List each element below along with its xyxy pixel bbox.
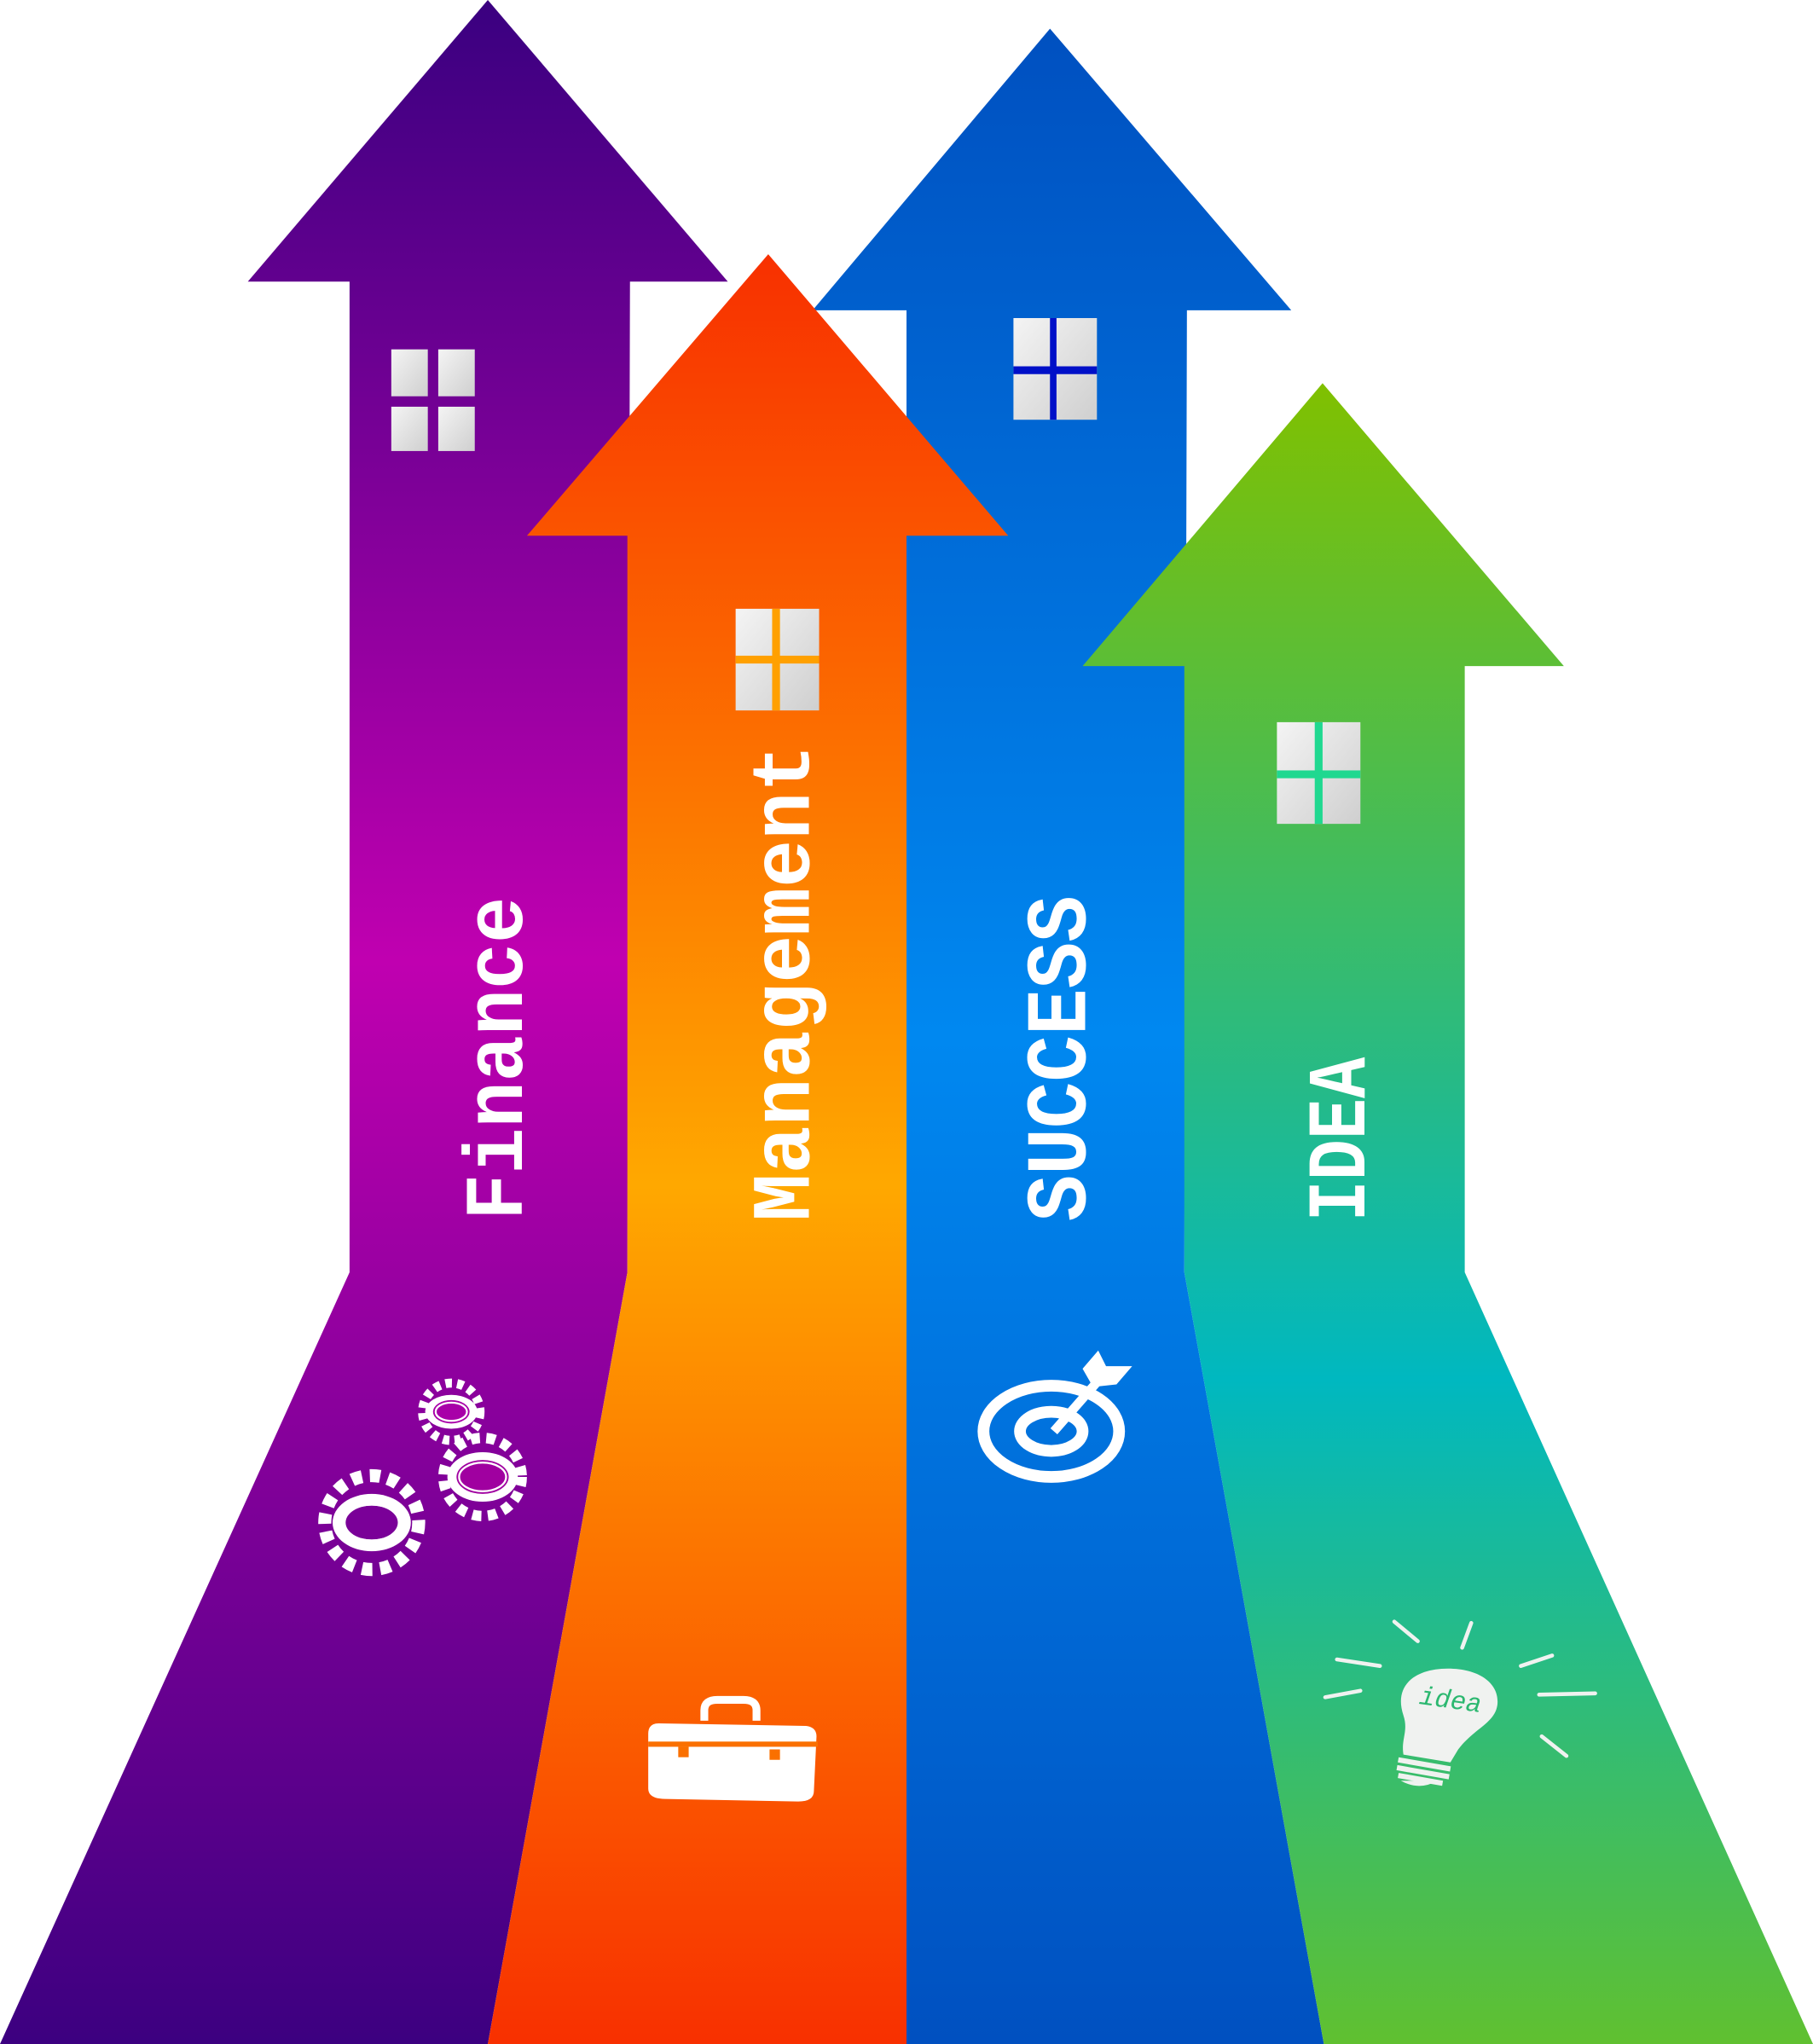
window: orange: [736, 609, 820, 710]
window: purple: [391, 350, 475, 451]
arrow: Management (orange): [488, 254, 1008, 2044]
arrow: Idea (green): [1082, 383, 1813, 2044]
label: Management: Management: [740, 744, 834, 1221]
window: blue: [1013, 318, 1097, 420]
icon: lightbulb: [1325, 1622, 1596, 1786]
arrow: Success (blue): [813, 29, 1324, 2044]
arrow: Finance (purple): [0, 0, 727, 2044]
icon: briefcase: [648, 1699, 818, 1802]
window: green: [1277, 722, 1360, 824]
label: IDEA: IDEA: [1296, 1057, 1390, 1221]
label: SUCCESS: SUCCESS: [1015, 895, 1112, 1221]
icon: lightbulb: idea: [1417, 1683, 1483, 1721]
icon: gears: [325, 1383, 522, 1570]
label: Finance: Finance: [454, 897, 547, 1220]
icon: target: [983, 1351, 1132, 1477]
